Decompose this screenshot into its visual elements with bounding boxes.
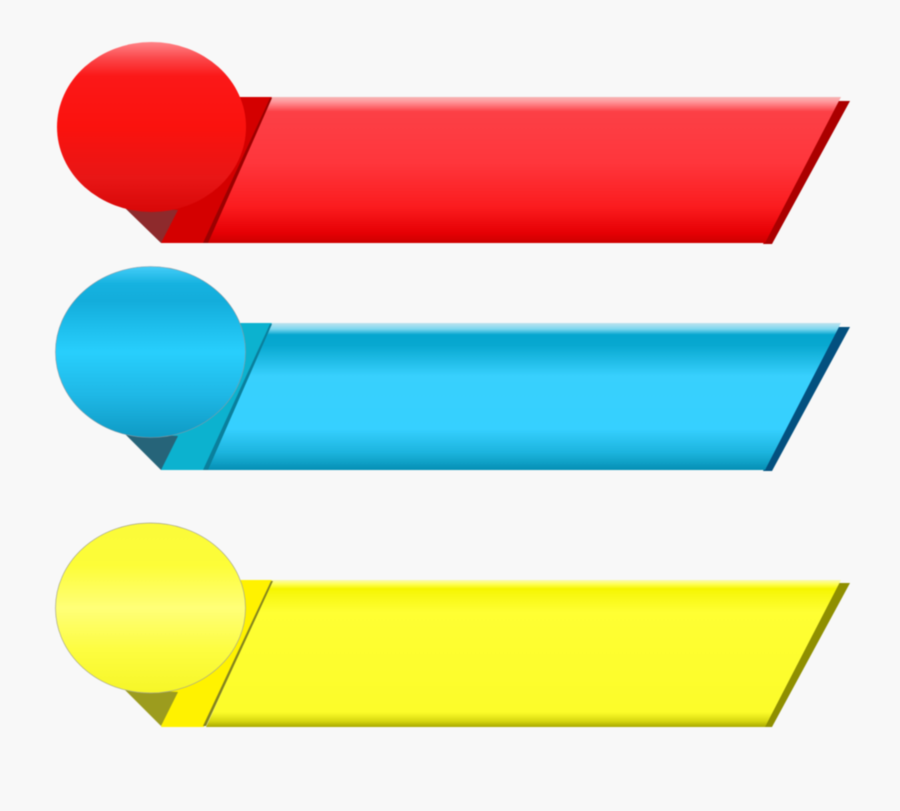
red banner [57,42,850,244]
red banner: main bar [206,97,841,243]
blue banner: main bar [206,323,841,470]
yellow banner: main bar [206,580,841,727]
red banner: fold tab [161,97,272,243]
blue banner: right edge shadow [763,327,850,471]
blue banner: fold tab [161,323,272,470]
blue banner: fold shadow triangle [124,433,178,470]
yellow banner [56,523,850,727]
red banner: fold shadow triangle [124,207,178,243]
yellow banner: fold shadow triangle [124,689,178,726]
red banner: bar left edge line [203,98,272,243]
blue banner [56,266,850,471]
yellow banner: circle [56,523,246,693]
yellow banner: bar left edge line [203,581,273,726]
red banner: right edge shadow [763,101,850,244]
yellow banner: fold tab [161,580,272,727]
blue banner: circle [56,266,246,438]
red banner: circle [57,42,246,212]
blue banner: bar left edge line [203,324,272,470]
yellow banner: right edge shadow [763,583,850,727]
